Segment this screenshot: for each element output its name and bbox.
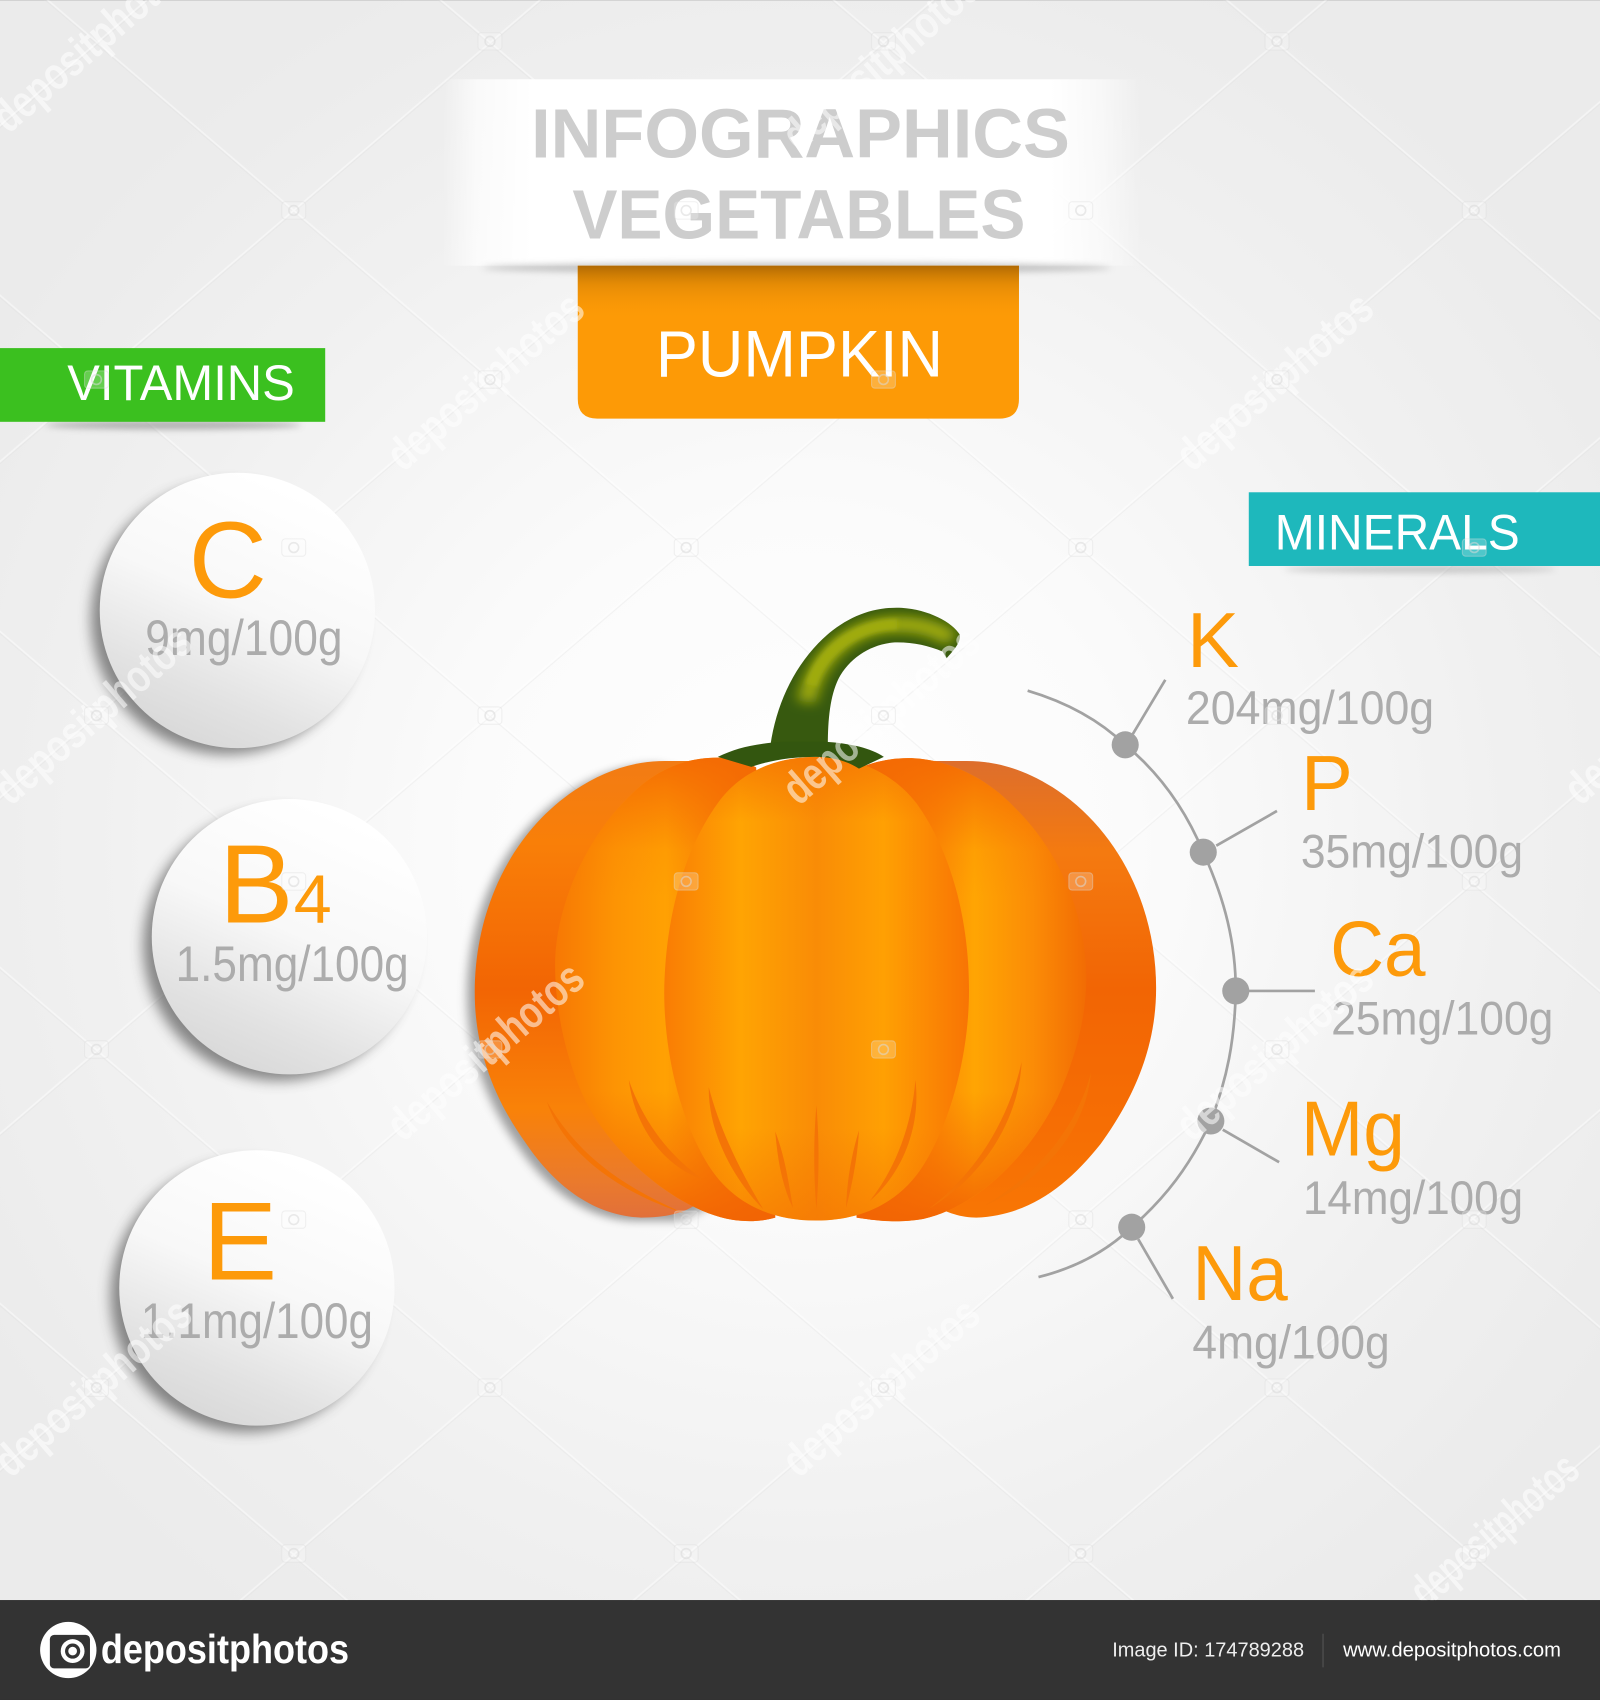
vitamin B4 disc: 1.5mg/100g (176, 936, 409, 992)
vitamins label: VITAMINS (67, 355, 295, 411)
watermarks: depositphotos (1166, 952, 1383, 1150)
right middle lobe (857, 758, 1086, 1221)
vitamin B4 disc (143, 799, 427, 1081)
mineral: Mg: 14mg/100g (1303, 1172, 1523, 1225)
mineral: Na: Na (1192, 1229, 1288, 1317)
minerals arc (1028, 680, 1315, 1299)
pumpkin label: PUMPKIN (656, 317, 943, 391)
mineral: P: 35mg/100g (1301, 825, 1523, 878)
vitamin E disc: E (203, 1178, 277, 1303)
panel shadow (482, 262, 1111, 273)
mineral: P: P (1301, 739, 1353, 827)
mineral: Mg: Mg (1301, 1085, 1405, 1173)
watermarks: depositphotos (376, 282, 594, 480)
vitamin C disc: C (189, 499, 267, 620)
pumpkin tab (578, 266, 1019, 419)
footer brand: depositphotos (101, 1626, 349, 1672)
watermarks: depositphotos (376, 952, 594, 1150)
right outer lobe (928, 761, 1156, 1218)
vitamin B4 disc: 4 (294, 862, 332, 938)
footer bar (0, 1600, 1600, 1700)
vitamin C disc: 9mg/100g (145, 610, 343, 666)
mineral: K (1186, 596, 1434, 735)
calyx (718, 742, 884, 769)
mineral: Na: 4mg/100g (1192, 1316, 1390, 1369)
title panel (442, 79, 1141, 266)
center lobe (664, 757, 969, 1221)
spokes (1133, 680, 1315, 1299)
vitamins tab (0, 348, 325, 429)
mineral: Ca (1330, 905, 1553, 1045)
watermarks: depositphotos (1166, 282, 1383, 480)
title text: INFOGRAPHICS (531, 94, 1070, 172)
watermarks: depositphotos (772, 616, 990, 814)
title text (531, 94, 1070, 254)
stem (770, 608, 960, 743)
icon: camera logo (40, 1622, 96, 1678)
website: www.depositphotos.com (1342, 1639, 1561, 1662)
mineral: Na (1192, 1229, 1390, 1369)
minerals tab (1249, 492, 1600, 573)
pumpkin ribs (547, 1062, 1091, 1213)
vitamin B4 disc: B (219, 822, 293, 947)
vitamin E disc: 1.1mg/100g (141, 1293, 373, 1349)
mineral: Ca: 25mg/100g (1331, 992, 1553, 1045)
arc nodes (1112, 731, 1249, 1241)
left middle lobe (555, 758, 775, 1221)
mineral: K: K (1187, 596, 1239, 684)
watermarks: depositphotos (772, 1288, 990, 1486)
left outer lobe (475, 761, 699, 1218)
mineral: K: 204mg/100g (1186, 682, 1434, 735)
title text: VEGETABLES (572, 176, 1025, 254)
mineral: Mg (1301, 1085, 1523, 1225)
mineral: P (1301, 739, 1523, 878)
pumpkin illustration (467, 597, 1156, 1221)
image id: Image ID: 174789288 (1112, 1639, 1304, 1662)
minerals label: MINERALS (1275, 505, 1520, 561)
vitamin E disc (111, 1150, 395, 1432)
mineral: Ca: Ca (1330, 905, 1426, 993)
vitamin C disc (91, 473, 375, 755)
